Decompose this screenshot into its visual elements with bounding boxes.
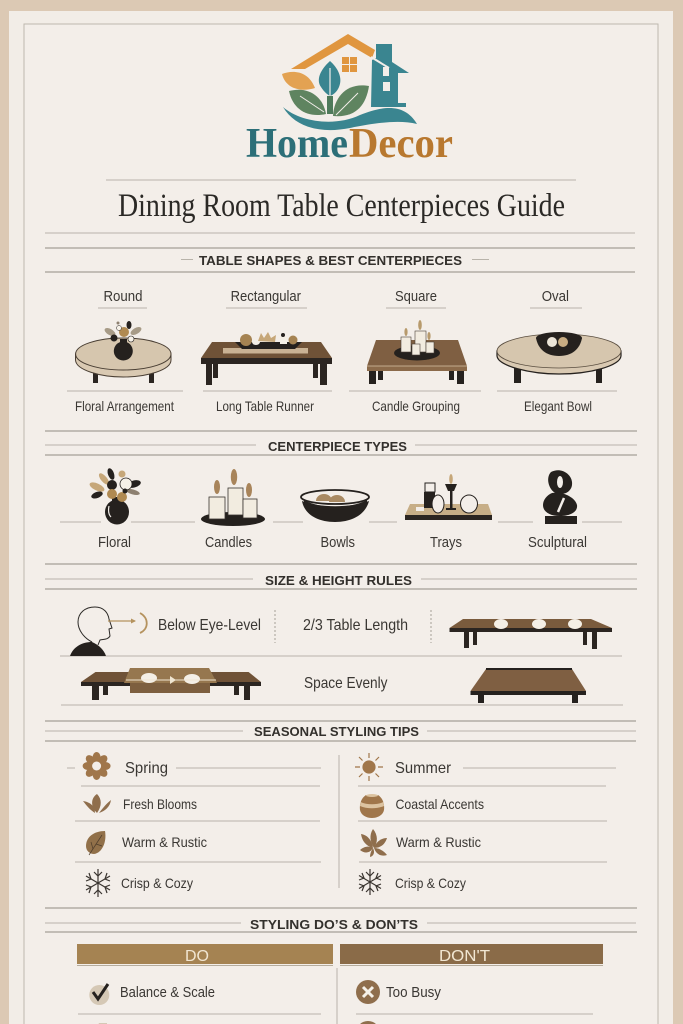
- header: do: [77, 944, 333, 966]
- card: square table: Square: [395, 288, 437, 305]
- card: round table: Floral Arrangement: [75, 398, 174, 414]
- rule: below eye-level: Below Eye-Level: [158, 617, 261, 634]
- icon: vase: [360, 794, 384, 818]
- icon: snowflake: [359, 869, 381, 895]
- heading: size and height rules: SIZE & HEIGHT RULES: [265, 573, 412, 588]
- item: floral: Floral: [98, 534, 131, 551]
- rule: below eye-level: [70, 607, 261, 656]
- item: floral: [88, 467, 142, 551]
- item: candles: Candles: [205, 534, 252, 551]
- column: summer: Warm & Rustic: [396, 834, 481, 850]
- header: do: DO: [185, 948, 209, 965]
- wordmark: Decor: [349, 121, 453, 167]
- heading: seasonal styling tips: SEASONAL STYLING TIPS: [254, 724, 419, 739]
- column: don't: [340, 944, 603, 1024]
- icon: check: [89, 984, 109, 1005]
- card: oval table: [497, 288, 621, 414]
- column: don't: Too Busy: [386, 984, 441, 1001]
- item: trays: Trays: [430, 534, 462, 551]
- column: spring: Warm & Rustic: [122, 834, 207, 850]
- item: bowls: Bowls: [320, 534, 355, 551]
- icon: partial check, next row: [98, 1023, 107, 1024]
- wordmark: [246, 121, 453, 167]
- icon: sculpture: [543, 470, 577, 524]
- rule: two-thirds table length: [303, 617, 612, 649]
- icon: snowflake: [86, 869, 110, 897]
- icon: cross: [356, 980, 380, 1004]
- rule: space evenly: [81, 668, 586, 703]
- item: bowls: [301, 490, 369, 551]
- icon: sprout: [83, 794, 111, 813]
- card: rectangular table: Long Table Runner: [216, 398, 314, 414]
- card: round table: Round: [104, 288, 142, 305]
- column: do: Balance & Scale: [120, 984, 215, 1001]
- icon: house and leaves: [282, 34, 417, 130]
- heading: table shapes: TABLE SHAPES & BEST CENTERPIECES: [199, 253, 462, 268]
- column: summer: Summer: [395, 760, 452, 777]
- icon: leaf: [86, 831, 105, 855]
- card: rectangular table: [201, 288, 332, 414]
- panel: seasonal styling tips: [83, 724, 484, 897]
- header: don't: [340, 944, 603, 966]
- column: summer: Coastal Accents: [396, 796, 484, 812]
- icon: tray with objects: [405, 474, 492, 520]
- logo: HomeDecor: [246, 34, 453, 167]
- panel: table shapes: [67, 253, 621, 414]
- item: sculptural: Sculptural: [528, 534, 587, 551]
- card: square table: [349, 288, 481, 414]
- heading: centerpiece types: CENTERPIECE TYPES: [268, 439, 407, 454]
- panel: centerpiece types: [88, 439, 587, 551]
- item: candles: [201, 469, 265, 551]
- column: spring: [83, 752, 207, 897]
- card: square table: Candle Grouping: [372, 398, 460, 414]
- icon: table with runner and arrows: [81, 668, 261, 700]
- icon: candles on tray: [201, 469, 265, 526]
- icon: head with sightline: [70, 607, 147, 656]
- icon: partial cross, next row: [356, 1021, 380, 1024]
- icon: floral vase: [88, 467, 142, 524]
- rule: two-thirds table length: 2/3 Table Length: [303, 617, 408, 634]
- panel: styling do's and don'ts: [77, 917, 603, 1024]
- column: spring: Crisp & Cozy: [121, 875, 193, 891]
- icon: plain table: [470, 668, 586, 703]
- card: oval table: Oval: [542, 288, 569, 305]
- icon: flower: [83, 752, 111, 780]
- heading: styling do's and don'ts: STYLING DO’S & DON’TS: [250, 917, 418, 932]
- column: spring: Fresh Blooms: [123, 796, 197, 812]
- icon: bowl: [301, 490, 369, 522]
- icon: round table with floral: [76, 321, 171, 383]
- icon: rectangular table with runner: [201, 332, 332, 385]
- title: Dining Room Table Centerpieces Guide: [118, 188, 565, 224]
- icon: table with three plates: [450, 619, 612, 649]
- wordmark: Home: [246, 121, 348, 167]
- rule: space evenly: Space Evenly: [304, 675, 388, 692]
- item: trays: [405, 474, 492, 551]
- icon: sun: [355, 753, 383, 781]
- icon: square table with candles: [367, 320, 467, 384]
- item: sculptural: [528, 470, 587, 551]
- icon: oval table with bowl: [497, 332, 621, 383]
- column: summer: [355, 753, 484, 895]
- column: summer: Crisp & Cozy: [395, 875, 466, 891]
- column: do: [77, 944, 333, 1024]
- panel: size and height rules: [70, 573, 612, 703]
- card: rectangular table: Rectangular: [231, 288, 301, 305]
- card: oval table: Elegant Bowl: [524, 398, 592, 414]
- column: spring: Spring: [125, 760, 168, 777]
- header: don't: DON'T: [439, 948, 490, 965]
- card: round table: [67, 288, 183, 414]
- icon: maple leaf: [360, 829, 387, 857]
